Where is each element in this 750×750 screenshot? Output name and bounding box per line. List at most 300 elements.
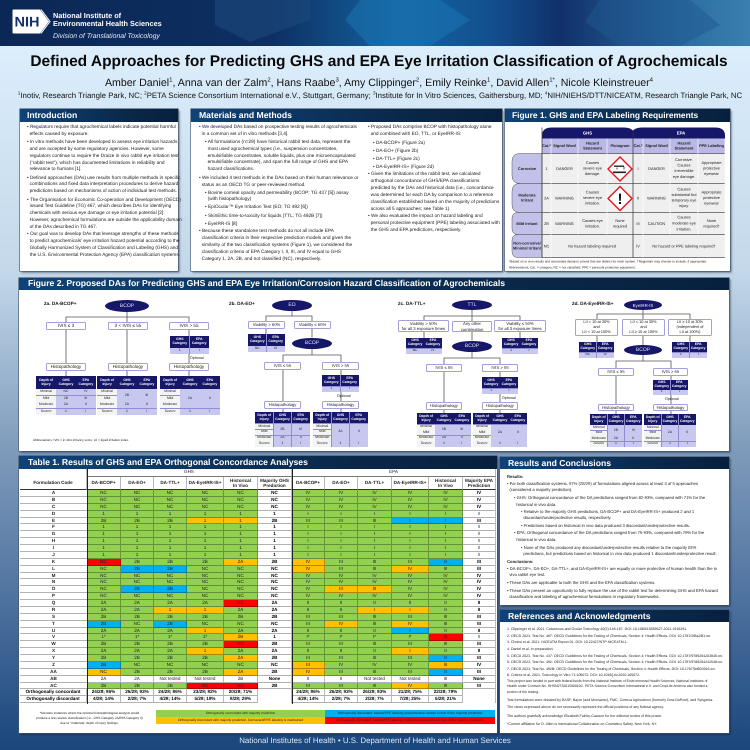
table: concordance results: I [445, 538, 446, 543]
table: concordance results: 1 [136, 531, 138, 536]
table: concordance results: III [339, 566, 343, 571]
table: concordance results: NC [134, 572, 140, 578]
depth table 3 [160, 376, 220, 415]
text: reference list: 7. OECD 2023. Test No. 492B: OECD Guidelines for the Testing of Chemicals, Section 4: Health Effects. DOI: 10.1787/0d603916-en. [507, 667, 716, 671]
table: concordance results: NC [167, 579, 173, 584]
table: concordance results: H [52, 538, 55, 543]
depth table 2: I [146, 409, 147, 413]
table: concordance results: I [409, 518, 411, 522]
table: concordance results: Not tested [160, 676, 180, 681]
table: concordance results: I [340, 538, 342, 543]
table: concordance results: 2B [202, 655, 208, 660]
table: concordance results: 2A [238, 607, 243, 612]
table: concordance results: 2B [167, 641, 173, 646]
table: concordance results: 1 [239, 524, 242, 529]
table: labeling requirements: Abbreviations: Cat. = category; NC = not classified; PPE = personal protective equipment. [509, 265, 636, 269]
table: concordance results: 2B [272, 641, 277, 646]
depth table 2: III [145, 393, 148, 397]
organisation name: National Institute of [53, 11, 121, 20]
table: concordance results: N [52, 579, 55, 584]
box: LII high [668, 319, 712, 336]
table: concordance results: 2B [101, 662, 106, 667]
table: concordance results: NC [100, 593, 107, 598]
footer: National Institutes of Health • U.S. Department of Health and Human Services [239, 736, 511, 745]
depth table 2: Depth of Injury [100, 378, 114, 386]
table: concordance results: 1 [136, 538, 138, 543]
box: LII mixed: LII ≥ 10 at 100% [629, 329, 658, 334]
text: affiliation: *Current affiliation for D. Allen is International Collaboration on Cosmetics Safety, New York, NY. [507, 722, 657, 726]
panel: figure 1 [505, 109, 730, 271]
panel: results and conclusions [500, 457, 729, 605]
table: concordance results: IV [339, 572, 343, 578]
text: test methods: status as an OECD TG or peer-reviewed method. [202, 183, 306, 188]
table: concordance results: Z [52, 662, 55, 667]
text: funding: portion of the testing. [507, 690, 539, 694]
depth table 1: GHS Category [275, 413, 290, 421]
table: labeling requirements: NC [544, 243, 549, 248]
table: concordance results: 6/28; 21% [435, 696, 456, 701]
text: formulations: emulsifiable concentrates, soluble liquids, plus one microencapsulated [208, 154, 356, 159]
table: concordance results: I [445, 552, 446, 557]
box: histopathology 1 [264, 401, 301, 408]
table: concordance results: DA-EO+ [332, 480, 350, 485]
table: concordance results: I [409, 524, 411, 529]
text: OECD: • The Organisation for Economic Co-operation and Development (OECD) [27, 198, 181, 202]
affiliations: 1Inotiv, Research Triangle Park, NC; 2PETA Science Consortium International e.V., Stuttgart, Germany; 3Institute for In Vitro Sciences, Gaithersburg, MD; 4NIH/NIEHS/DTT/NICEATM, Research Triangle Park, NC [18, 90, 742, 100]
depth table 2: 1 [126, 409, 128, 413]
table: concordance results: 1 [169, 607, 171, 612]
text: classification criteria: classification criteria of EPA Category I, II, III, and IV equal to GHS [202, 250, 341, 255]
table: concordance results: 1 [169, 511, 171, 516]
table: concordance results: 1 [169, 524, 171, 529]
table: concordance results: II [307, 607, 309, 612]
table: labeling requirements: irritation. [585, 223, 600, 228]
table: concordance results: IV [477, 490, 481, 495]
table: concordance results: 1 [204, 511, 206, 516]
table: concordance results: 1 [239, 511, 242, 516]
table: concordance results: 2B [101, 518, 106, 522]
table: concordance results: NC [271, 566, 278, 571]
table: labeling requirements: Statement [583, 145, 603, 150]
table: concordance results: 1 [102, 538, 105, 543]
depth table 1: Depth of Injury [419, 414, 433, 422]
table: concordance results: Majority GHS [260, 478, 289, 483]
table: concordance results: III [477, 566, 481, 571]
table: concordance results: 1 [204, 648, 206, 653]
table: concordance results: I [478, 524, 480, 529]
table: labeling requirements: eye damage. [673, 173, 695, 178]
table: concordance results: 1 [273, 511, 276, 516]
text: DA list [373, 140, 434, 170]
depth table 1: 2B [442, 427, 446, 431]
table: concordance results: 2B [101, 641, 106, 646]
table: labeling requirements: None [615, 218, 625, 222]
depth table 1: III [632, 428, 635, 432]
table: labeling requirements: damage. [585, 170, 600, 176]
text: DA list: • DA-TTL+ (Figure 2c) [373, 157, 420, 162]
table: concordance results: I [409, 628, 411, 632]
table: concordance results: Prediction [468, 483, 490, 488]
table: concordance results: 24/28; 86% [158, 689, 182, 694]
table divider GHS [86, 469, 89, 704]
mini table: category 1 after IVIS: GHS Category [484, 378, 498, 386]
table: concordance results: I [340, 524, 342, 529]
table: concordance results: 1 [102, 524, 105, 529]
box: any other [452, 321, 492, 332]
table: concordance results: II [478, 628, 480, 632]
text: GHS detail [521, 508, 694, 520]
table: concordance results: 2B [134, 682, 140, 688]
text: protective [507, 566, 717, 577]
table: concordance results: NC [237, 504, 244, 509]
table: labeling requirements: I [637, 166, 639, 170]
depth table 2: 2B [125, 393, 129, 397]
text: EPA detail: • None of the DAs produced any discordant/underprotective results relative to the majority EPA [521, 544, 696, 550]
depth table 1 [255, 412, 310, 447]
table: concordance results: 2B [134, 586, 140, 591]
table: concordance results: 2B [202, 669, 208, 674]
text: defined approaches [27, 176, 180, 194]
depth table 1: Mild [43, 396, 49, 400]
table: concordance results: NC [237, 579, 244, 584]
table: concordance results: Y [52, 655, 55, 660]
table: concordance results: 2B [134, 669, 140, 674]
mini table: NC: GHS Category [250, 335, 265, 343]
box: any other: Any other [463, 321, 481, 326]
table: concordance results: 2A [238, 628, 243, 632]
depth table 2 [313, 412, 368, 447]
table: concordance results: NC [237, 600, 244, 605]
table: concordance results: NC [271, 662, 278, 667]
table: concordance results: II [307, 676, 309, 681]
table: concordance results: I [445, 518, 446, 522]
box: IVIS high: IVIS > 55 [491, 365, 509, 370]
text: EO: • EpiOcular™ Eye Irritation Test (EO; TG 492 [6]) [205, 205, 308, 210]
note: optional: Optional [502, 396, 516, 400]
depth table 1: Depth of Injury [257, 413, 271, 421]
box: IVIS high [322, 362, 359, 370]
table: concordance results: 2B [167, 682, 173, 688]
table: labeling requirements: eyewear [704, 170, 720, 176]
table: concordance results: Historical [435, 478, 456, 483]
table: concordance results: A [52, 490, 55, 495]
box: histopathology 2: Histopathology [486, 403, 514, 408]
table: concordance results: III [477, 614, 481, 619]
box: histopathology 2 [108, 363, 148, 371]
text: majority [507, 481, 698, 492]
table: concordance results: DA-EyeIRR-IS+ [189, 480, 221, 485]
table: concordance results: 2B [134, 518, 140, 522]
footnote [36, 710, 143, 725]
table: concordance results: NC [271, 593, 278, 598]
table: concordance results: 1 [239, 545, 242, 550]
table: concordance results: NC [134, 504, 140, 509]
text: GHS concordance: • GHS: Orthogonal concordance of the DA predictions ranged from 82-93%, compared with 71% for the [514, 495, 705, 500]
text: replace rabbit test: • These DAs present an opportunity to fully replace the use of the rabbit test for determining GHS and EPA hazard [507, 588, 718, 592]
depth table 3: I [209, 409, 210, 413]
table: labeling requirements: required† [703, 223, 720, 228]
text: thanks: The authors gratefully acknowledge Elizabeth Fairley-Cawson for her editorial review of this poster. [507, 714, 662, 718]
table: concordance results: I [478, 511, 480, 516]
table: concordance results: NC [134, 497, 140, 502]
table: labeling requirements: Hazard [678, 140, 691, 145]
table divider EPA [291, 469, 294, 704]
box: histopathology 1 [46, 363, 86, 371]
table: concordance results: 1 [169, 545, 171, 550]
table: concordance results: III [306, 518, 310, 522]
depth table 1: Depth of Injury [592, 415, 606, 423]
box: histopathology 2 [653, 404, 688, 411]
depth table 2: Depth of Injury [475, 414, 489, 422]
table: concordance results: III [339, 559, 343, 564]
depth table 1: Depth of Injury [39, 378, 53, 386]
table: concordance results: 2A [101, 628, 106, 632]
table: concordance results: J [52, 552, 55, 557]
abbreviations note: Abbreviations: IVIS = in vitro irritancy score; LII = liquid irritation index. [33, 438, 129, 442]
text: hazard labeling: • We also evaluated the impact on hazard labeling and [368, 214, 483, 219]
text: OECD: of the DAs described in TG 467. [30, 225, 97, 230]
text: protective: • DA-BCOP+, DA-EO+, DA-TTL+, and DA-EyeIRR-IS+ are equally or more protective of human health than the in [507, 566, 717, 571]
table: labeling requirements: IV [636, 243, 640, 248]
text: regulators [27, 124, 176, 137]
table: concordance results: I [374, 531, 375, 536]
node: BCOP: BCOP [465, 343, 479, 349]
box: viability low [294, 321, 331, 328]
table: concordance results: III [306, 682, 310, 688]
table: concordance results: 2A [134, 648, 140, 653]
node: BCOP [452, 340, 492, 352]
table: concordance results: IV [372, 579, 377, 584]
depth table 3: 1 [189, 409, 191, 413]
table: concordance results: IV [443, 504, 448, 509]
text: defined approaches: • Defined approaches (DAs) use results from multiple methods in specific [27, 176, 180, 180]
heading: materials and methods [191, 109, 502, 122]
table: concordance results: NC [167, 490, 173, 495]
table: concordance results: DA-TTL+ [160, 480, 180, 485]
text: defined approaches: combinations and fixed data interpretation procedures to derive hazard [30, 182, 178, 187]
table: concordance results: II [444, 559, 447, 564]
table: concordance results: 2/28; 7% [128, 696, 146, 701]
heading: introduction: Introduction [27, 110, 77, 120]
depth table 2: GHS Category [120, 378, 134, 386]
box: viability low: Viability ≤ 50% [506, 321, 534, 326]
table: concordance results: III [408, 559, 412, 564]
table: concordance results: II [307, 600, 309, 605]
box: IVIS low [426, 364, 462, 372]
node: BCOP: BCOP [636, 347, 650, 353]
table: labeling requirements: irritation. [585, 200, 600, 205]
table: labeling requirements: severe eye [583, 194, 602, 200]
depth table 3: 2A [188, 396, 192, 400]
depth table 2: Depth of Injury [646, 415, 660, 423]
depth table 3: Minimal [164, 389, 176, 393]
text: hazard labeling [368, 214, 500, 233]
mini table: category 1 [502, 338, 538, 354]
table: concordance results: 1 [273, 552, 276, 557]
table: concordance results: 2B [167, 621, 173, 626]
box: histopathology 2: Histopathology [657, 405, 684, 410]
table: concordance results: III [477, 559, 481, 564]
table: concordance results: NC [202, 497, 208, 502]
table: concordance results: III [373, 566, 376, 571]
legend: Orthogonally concordant with majority prediction [206, 711, 275, 715]
note: optional: Optional [337, 394, 351, 398]
table: concordance results: IV [372, 662, 377, 667]
table: concordance results: S [52, 614, 55, 619]
table: concordance results: III [339, 614, 343, 619]
table: concordance results: 2A [238, 648, 243, 653]
table: concordance results: 1 [169, 538, 171, 543]
table: concordance results: 1* [101, 634, 106, 639]
table: concordance results: IV [372, 593, 377, 598]
table: concordance results: G [52, 531, 55, 536]
depth table 1: GHS Category [609, 415, 623, 423]
table: concordance results: AC [50, 682, 57, 688]
table: concordance results: NC [237, 662, 244, 667]
table: labeling requirements: DANGER [556, 166, 573, 170]
table: concordance results: 2B [101, 614, 106, 619]
table: concordance results: 2A [167, 600, 173, 605]
table: concordance results: II [444, 669, 447, 674]
table: concordance results: 1 [273, 524, 276, 529]
text: GHS detail: • Relative to the majority GHS predictions, DA-BCOP+ and DA-EyeIRR-IS+ produced 2 and 1 [521, 508, 694, 514]
table: concordance results: 2B [167, 669, 173, 674]
table: concordance results: 2B [167, 518, 173, 522]
table: concordance results: I [409, 511, 411, 516]
table: concordance results: IV [443, 586, 448, 591]
box: viability high: for all 3 exposure times [402, 326, 445, 331]
table: concordance results: IV [477, 497, 481, 502]
table: concordance results: IV [443, 579, 448, 584]
text: formulations [205, 140, 356, 172]
text: BCOP [205, 190, 349, 202]
table: concordance results: L [52, 566, 55, 571]
box: IVIS high [169, 322, 209, 330]
text: historical GHS: • Predictions based on historical in vivo data produced 3 discordant/underprotective results. [521, 522, 690, 528]
table: concordance results: 24/28; 86% [92, 689, 115, 694]
table: concordance results: I [409, 648, 411, 653]
node: TTL [452, 300, 492, 310]
table: concordance results [20, 469, 496, 703]
table: concordance results: NC [100, 669, 107, 674]
text: defined approaches: predictions based on mechanisms of action of individual test methods. [30, 189, 177, 194]
text: hazard labeling: personal protective equipment (PPE) labeling associated with [371, 221, 500, 226]
box: LII low both [575, 319, 618, 336]
table: concordance results: I [409, 531, 411, 536]
text: orthogonal concordance: was determined for each DA by comparison to a reference [371, 193, 493, 198]
table: concordance results: 2B [202, 559, 208, 564]
table: labeling requirements: Causes eye [582, 218, 603, 222]
text: OECD: However, agrochemical formulations are outside the applicability domain [30, 218, 182, 223]
table: concordance results: I* [373, 634, 376, 639]
table: concordance results: 23/28; 82% [193, 689, 217, 694]
table: concordance results: II [409, 600, 411, 605]
box: histopathology 2: Histopathology [327, 402, 354, 407]
text: OECD [27, 198, 182, 230]
text: test methods [199, 176, 358, 188]
depth table 1: EPA Category [455, 414, 469, 422]
mini table: category 1: GHS Category [324, 376, 339, 384]
icon: exclamation pictogram: ! [618, 190, 622, 208]
depth table 2: EPA Category [680, 415, 695, 423]
table: concordance results: 22/28; 79% [434, 689, 457, 694]
table: labeling requirements: protective [703, 165, 720, 170]
table: concordance results: III [444, 614, 447, 619]
table: concordance results: NC [202, 593, 208, 598]
table: concordance results: IV [408, 490, 412, 495]
table: labeling requirements: protective [703, 194, 720, 200]
icon: NIH logo: NIH [14, 13, 40, 29]
table: concordance results: 1 [102, 545, 105, 550]
table: concordance results: I [307, 531, 309, 536]
table: concordance results: DA-TTL+ [365, 480, 384, 485]
table: concordance results: NC [134, 593, 140, 598]
text: donors: Test formulations were donated by BASF, Bayer (and Monsanto), FMC, Corteva Agriscience (formerly Dow-DuPont), and Syngenta. [507, 698, 713, 702]
depth table 3: Moderate [163, 402, 177, 406]
box: histopathology 2 [482, 402, 518, 410]
heading: results and conclusions: Results and Conclusions [508, 458, 611, 468]
text: BCOP: • Bovine corneal opacity and permeability (BCOP; TG 437 [5]) assay [205, 191, 349, 196]
table: concordance results: I [445, 511, 446, 516]
text: GHS concordance: historical in vivo data. [516, 502, 556, 506]
table: concordance results: III [408, 655, 412, 660]
table: concordance results: NC [100, 586, 107, 591]
depth table 2: 2A [125, 402, 129, 406]
box: IVIS mid: 3 < IVIS ≤ 55 [115, 323, 141, 328]
table: concordance results: III [408, 669, 412, 674]
table: labeling requirements: Causes [586, 189, 599, 194]
heading: figure 2: Figure 2. Proposed DAs for Predicting GHS and EPA Eye Irritation/Corrosion Hazard Classification of Agrochemicals [28, 278, 505, 288]
box: viability high [248, 321, 285, 328]
mini table: category 1 after IVIS [482, 377, 518, 394]
table: concordance results: 2B [167, 614, 173, 619]
depth table 1: EPA Category [626, 415, 641, 423]
box: viability high: Viability > 60% [253, 322, 280, 327]
table: concordance results: NC [100, 572, 107, 578]
table: concordance results: NC [202, 621, 208, 626]
table: concordance results: 2B [272, 614, 277, 619]
text: classification criteria: similarity of the two classification systems (Figure 1), we considered the [202, 243, 352, 248]
table: concordance results: 1 [239, 552, 242, 557]
icon: exclamation pictogram [608, 186, 632, 210]
table: labeling requirements: EPA [677, 130, 685, 135]
table: concordance results: II [373, 648, 376, 653]
depth table 2: GHS Category [333, 413, 348, 421]
box: IVIS low [46, 322, 86, 330]
table: concordance results: IV [477, 572, 481, 578]
box: IVIS low: IVIS ≤ 55 [274, 363, 291, 368]
depth table 1: 2B [64, 396, 68, 400]
table: concordance results: 1 [136, 511, 138, 516]
heading: materials and methods: Materials and Methods [199, 110, 292, 120]
text: OECD: issued Test Guideline (TG) 467, which describes DAs for identifying [30, 204, 171, 209]
text: orthogonal concordance: classification established based on the majority of predictions [371, 200, 499, 205]
text: reference list: 3. Choksi et al. 2021. NICEATM Report 01. DOI: 10.22427/NTP-NICEATM-1. [507, 640, 628, 644]
depth table 1: Minimal [40, 389, 52, 393]
table: concordance results: U [52, 628, 55, 632]
table: labeling requirements: substantial but [671, 192, 697, 196]
table: concordance results: 1 [136, 524, 138, 529]
table: concordance results: In Vivo [233, 483, 248, 488]
table: concordance results: IV [477, 586, 481, 591]
table: concordance results: 2A [134, 607, 140, 612]
table: concordance results: I [374, 524, 375, 529]
table: concordance results: II [340, 607, 342, 612]
table: concordance results: I* [306, 634, 310, 639]
table: concordance results: NC [167, 504, 173, 509]
table: concordance results: I [409, 552, 411, 557]
table: concordance results: I [374, 511, 375, 516]
